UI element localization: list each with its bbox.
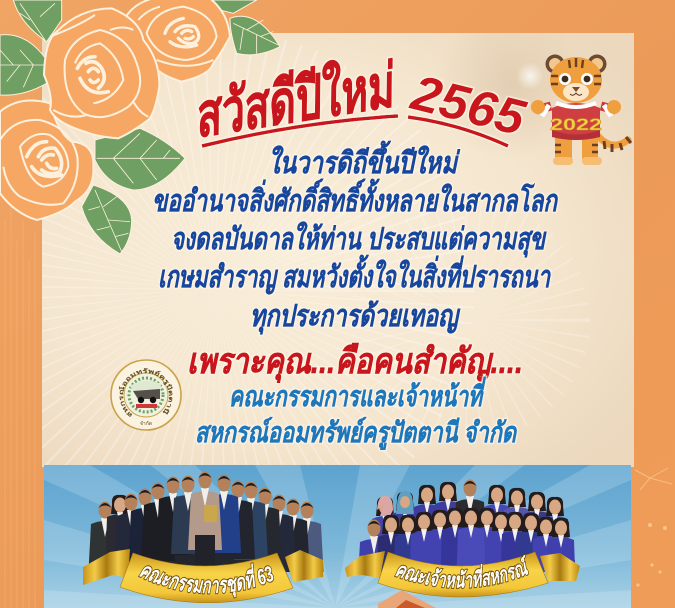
- icon: tiger mascot 2022: [531, 54, 631, 165]
- text block: signature: สหกรณ์ออมทรัพย์ครูปัตตานี จำกัด: [195, 416, 517, 450]
- decoration: roses and leaves: [0, 0, 280, 254]
- ribbon: staff: คณะเจ้าหน้าที่สหกรณ์: [394, 554, 529, 589]
- rose: lower left: [0, 101, 93, 220]
- icon: cooperative seal: [110, 359, 182, 431]
- rose: top right: [125, 0, 230, 82]
- title: new year greeting: 2565: [405, 64, 532, 147]
- text block: signature: คณะกรรมการและเจ้าหน้าที่: [229, 376, 487, 412]
- panel: cream message panel: [42, 10, 634, 467]
- icon: tiger mascot 2022: 2022: [550, 115, 602, 134]
- title: new year greeting: สวัสดีปีใหม่: [188, 51, 402, 150]
- rose: centre: [44, 8, 159, 138]
- text block: blessing message: จงดลบันดาลให้ท่าน ประสบแต่ความสุข: [171, 221, 547, 258]
- ribbon: committee: [83, 549, 323, 603]
- text block: blessing message: [152, 140, 558, 335]
- slogan: เพราะคุณ...คือคนสำคัญ....: [187, 342, 523, 383]
- icon: cooperative seal: สหกรณ์ออมทรัพย์ครูปัตตานี: [119, 368, 173, 417]
- text block: signature: [195, 376, 517, 450]
- ribbon: committee: คณะกรรมการชุดที่ 63: [138, 562, 274, 598]
- photo: staff group: [359, 480, 575, 572]
- text block: blessing message: ในวารดิถีขึ้นปีใหม่: [268, 140, 460, 180]
- text block: blessing message: ทุกประการด้วยเทอญ: [250, 300, 461, 335]
- ribbon: staff: [345, 551, 580, 598]
- icon: cooperative seal: จำกัด: [140, 421, 152, 427]
- leaves: [0, 0, 280, 254]
- banner: blue staff photo band: [44, 465, 631, 608]
- photo: committee group: [88, 472, 324, 580]
